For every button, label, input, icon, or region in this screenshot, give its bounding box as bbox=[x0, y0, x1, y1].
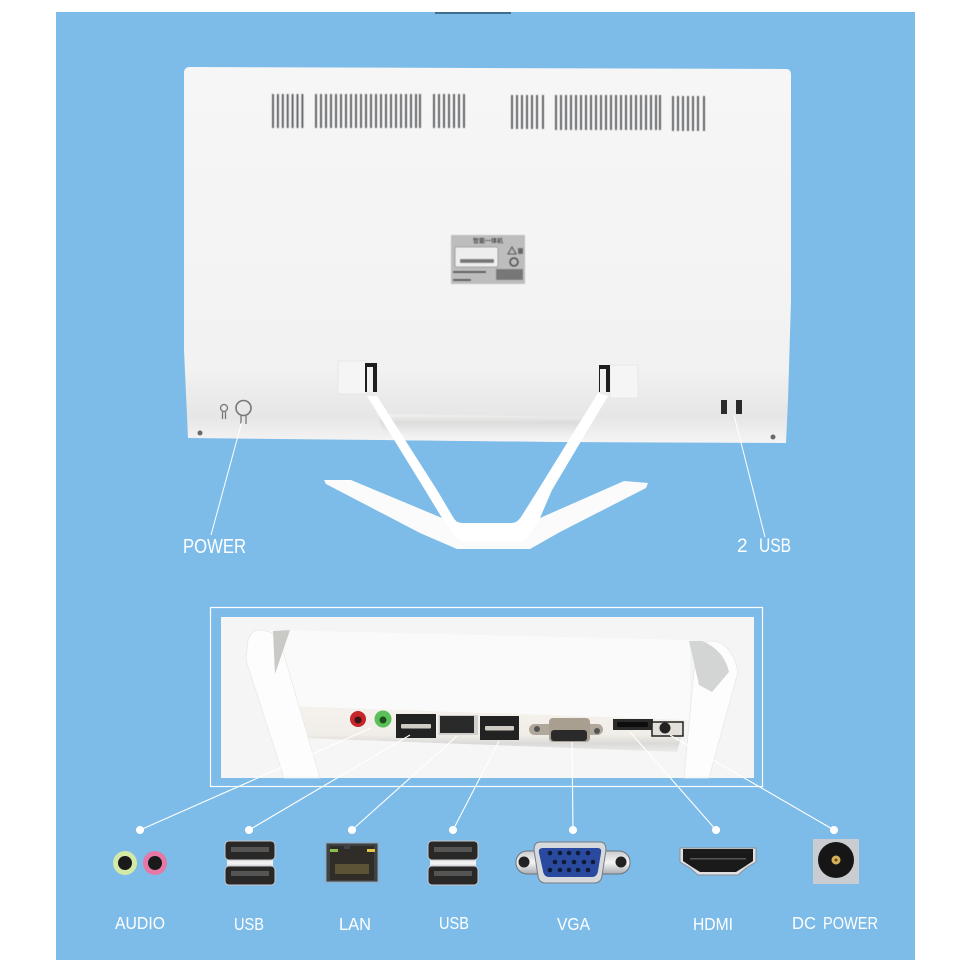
stand recess shading bbox=[377, 414, 590, 442]
audio jacks bbox=[350, 710, 392, 728]
callout line: power bbox=[211, 423, 242, 535]
rating label: 智能一体机 bbox=[473, 237, 503, 245]
lower recess bbox=[290, 738, 690, 778]
monitor rear view bbox=[184, 67, 791, 443]
label: LAN: LAN bbox=[339, 914, 371, 934]
LAN port bbox=[438, 715, 478, 735]
label: AUDIO: AUDIO bbox=[115, 913, 165, 933]
connector lines bbox=[136, 728, 838, 834]
label: HDMI: HDMI bbox=[693, 914, 733, 934]
label: DC POWER: POWER bbox=[823, 913, 878, 933]
callout line: side USB bbox=[734, 415, 765, 537]
side USB ports bbox=[721, 400, 742, 414]
port photo bbox=[221, 617, 754, 778]
icon: VGA bbox=[516, 842, 630, 883]
label: 2 USB: USB bbox=[759, 536, 791, 557]
top edge mark bbox=[435, 12, 511, 14]
right grey wedge bbox=[689, 641, 729, 692]
VGA port bbox=[529, 718, 603, 742]
stand arms bbox=[367, 393, 608, 542]
label: VGA: VGA bbox=[557, 914, 590, 934]
left grey wedge bbox=[273, 630, 290, 674]
icon: USB bbox=[428, 841, 478, 885]
label: USB: USB bbox=[234, 914, 264, 934]
HDMI port bbox=[613, 719, 653, 730]
icon: DC power bbox=[813, 839, 859, 884]
label: 2 USB: 2 bbox=[737, 536, 748, 557]
mounting screws bbox=[198, 430, 776, 440]
monitor body bbox=[184, 67, 791, 443]
USB port 1 bbox=[396, 714, 436, 738]
label: POWER: POWER bbox=[183, 536, 246, 558]
right stand arm bbox=[684, 641, 738, 778]
ventilation slots bbox=[273, 94, 704, 131]
frame around port photo bbox=[210, 608, 762, 786]
stand mount right bbox=[599, 365, 638, 398]
rating label bbox=[451, 235, 525, 284]
icon: USB bbox=[225, 841, 275, 885]
upper housing bbox=[270, 630, 690, 720]
icon: audio jacks bbox=[113, 851, 167, 875]
stand base bbox=[324, 480, 648, 549]
label: DC POWER bbox=[792, 913, 878, 933]
label: DC POWER: DC bbox=[792, 913, 816, 933]
stand mount left bbox=[338, 361, 377, 394]
label: 2 USB bbox=[737, 536, 791, 557]
photo background bbox=[221, 617, 754, 778]
DC power port bbox=[652, 722, 683, 736]
icon: HDMI bbox=[680, 848, 756, 875]
icon: LAN bbox=[326, 843, 378, 882]
USB port 2 bbox=[480, 716, 519, 740]
label: USB: USB bbox=[439, 913, 469, 933]
port panel face bbox=[284, 706, 686, 752]
power button and keyhole icons bbox=[220, 400, 251, 424]
left stand arm bbox=[246, 630, 320, 778]
arm groove shading bbox=[460, 540, 523, 542]
